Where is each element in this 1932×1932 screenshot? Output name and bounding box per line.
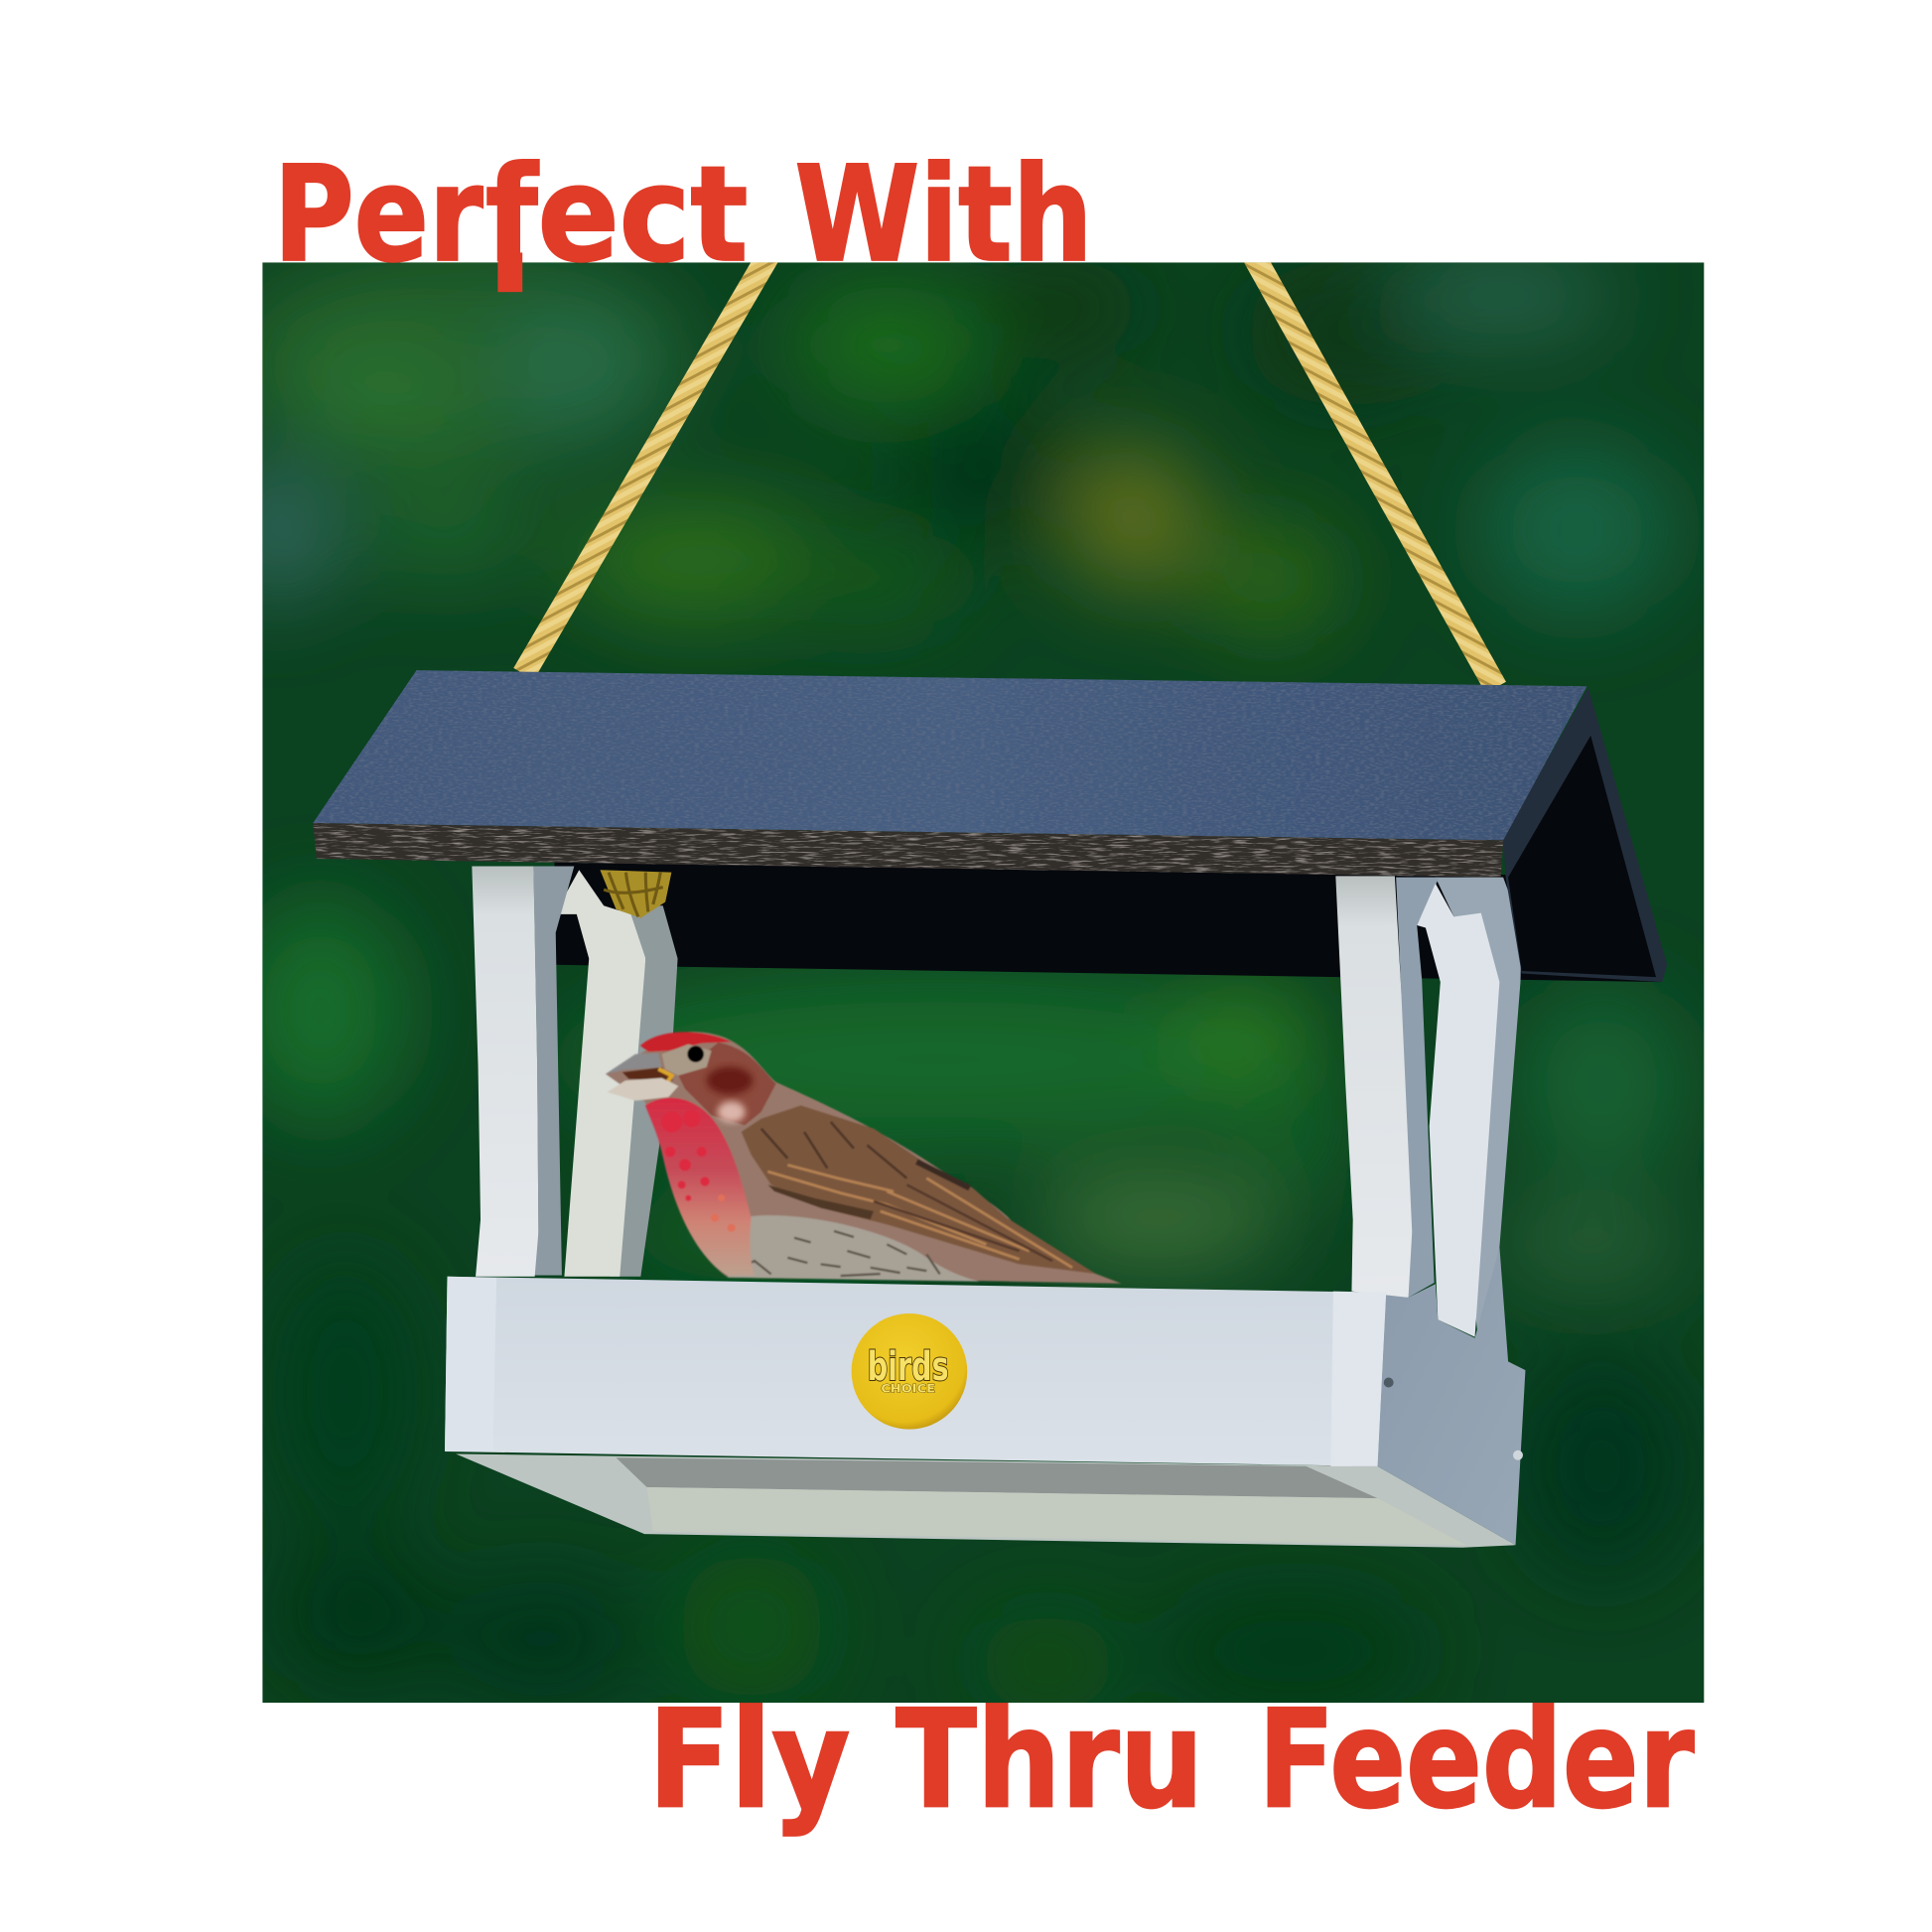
mouth: [622, 1067, 673, 1080]
gape: [658, 1069, 672, 1083]
feeder tray front: [445, 1277, 1386, 1466]
roof top face: [313, 670, 1587, 840]
side panel: [1378, 1247, 1525, 1545]
dark wing patch: [767, 1184, 874, 1219]
birds choice logo badge: [852, 1313, 967, 1430]
title: Perfect With: With: [794, 139, 1093, 292]
screws: [1384, 1378, 1523, 1460]
wing: [742, 1105, 1096, 1274]
feeder tray underside: [456, 1453, 1516, 1548]
side panel cutout: [1417, 884, 1499, 1337]
eye: [687, 1045, 704, 1062]
wing feather lines: [761, 1122, 1072, 1268]
title: Fly Thru Feeder: Feeder: [1258, 1681, 1695, 1839]
right hanging rope: [1252, 252, 1496, 688]
title: Perfect With: Per: [274, 139, 483, 292]
birds choice logo badge: birds: [868, 1344, 949, 1390]
roof front edge: [313, 823, 1503, 878]
face: [662, 1044, 712, 1075]
photo: bird on fly-through feeder: [215, 246, 1704, 1713]
rope knot: [600, 870, 671, 918]
title: Fly Thru Feeder: Fly: [648, 1681, 850, 1839]
belly: [728, 1215, 980, 1282]
front left post: [472, 866, 574, 1277]
birds choice logo badge: CHOICE: [881, 1382, 935, 1395]
crown: [640, 1033, 732, 1051]
back left post: [554, 870, 678, 1277]
title: Perfect With: [274, 139, 1093, 292]
title: Perfect With: fect: [485, 139, 748, 292]
title: Fly Thru Feeder: Thru: [896, 1681, 1204, 1839]
breast mottling: [661, 1110, 736, 1232]
front right post: [1335, 876, 1412, 1298]
breast: [645, 1098, 755, 1276]
throat highlight: [718, 1101, 746, 1123]
house finch: [606, 1032, 1121, 1284]
title: Fly Thru Feeder: [648, 1681, 1695, 1839]
upper beak: [606, 1053, 662, 1074]
roof gable end: [1503, 688, 1667, 982]
lower beak: [608, 1078, 678, 1101]
bird body: [606, 1032, 1121, 1284]
back right post: [1396, 878, 1522, 1343]
head: [678, 1042, 776, 1125]
blurred green foliage background: [215, 246, 1704, 1713]
cheek patch: [707, 1066, 753, 1094]
roof underside: [554, 863, 1662, 982]
left hanging rope: [523, 252, 770, 674]
belly streaks: [735, 1231, 940, 1276]
